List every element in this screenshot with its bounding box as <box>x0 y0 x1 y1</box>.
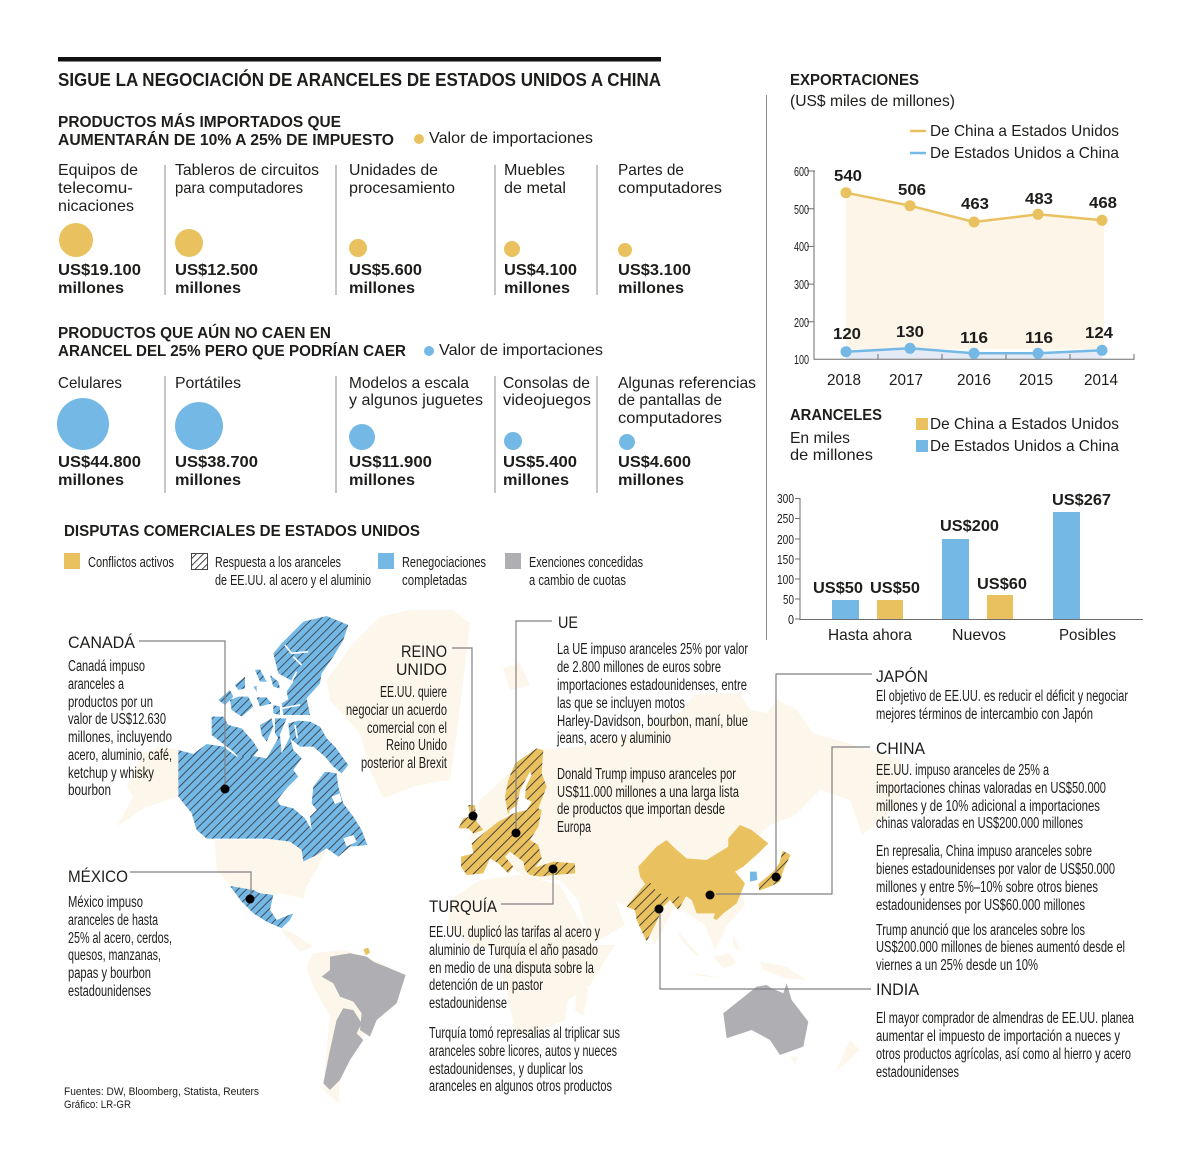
callout: UE: Donald Trump impuso aranceles por <box>557 766 736 783</box>
callout: Reino Unido: comercial con el <box>367 720 447 737</box>
line chart: exportaciones: 200 <box>794 316 809 330</box>
legend item: exenciones: a cambio de cuotas <box>529 572 626 589</box>
item: portátiles: US$38.700 <box>175 454 258 471</box>
item: pantallas de computadores: Algunas referencias <box>618 375 756 392</box>
map: islas árticas <box>212 616 348 773</box>
legend: aranceles: De Estados Unidos a China <box>930 438 1119 455</box>
map: Canadá <box>178 616 367 862</box>
callout: Canadá: productos por un <box>68 694 153 711</box>
bar chart: aranceles: US$50 <box>870 580 920 597</box>
line chart: exportaciones: 120 <box>833 326 861 343</box>
item: muebles de metal: millones <box>504 280 570 297</box>
callout: Turquía: detención de un pastor <box>429 977 543 994</box>
item: consolas de videojuegos: Consolas de <box>503 375 590 392</box>
callout: China: estadounidenses por US$60.000 millones <box>876 897 1085 914</box>
item: tableros de circuitos: para computadores <box>175 180 303 197</box>
item: partes de computadores: millones <box>618 280 684 297</box>
item: unidades de procesamiento: millones <box>349 280 415 297</box>
line chart: exportaciones: 2017 <box>889 372 923 389</box>
item: tableros de circuitos: US$12.500 <box>175 262 258 279</box>
legend: exportaciones: De Estados Unidos a China <box>930 145 1119 162</box>
line chart: exportaciones: 2015 <box>1019 372 1053 389</box>
callout: México: aranceles de hasta <box>68 912 158 929</box>
line chart: exportaciones: 116 <box>1025 330 1053 347</box>
bar chart: aranceles: 300 <box>777 492 794 506</box>
line chart: exportaciones <box>794 165 1134 389</box>
bar chart: aranceles <box>777 492 1143 644</box>
line chart: exportaciones: 468 <box>1089 195 1117 212</box>
bar chart: aranceles: US$60 <box>977 576 1027 593</box>
callout: Canadá: acero, aluminio, café, <box>68 747 172 764</box>
heading: productos más importados: PRODUCTOS MÁS IMPORTADOS QUE <box>58 112 341 131</box>
callout: Turquía: TURQUÍA <box>429 897 497 916</box>
item: pantallas de computadores: de pantallas de <box>618 392 722 409</box>
callout: Reino Unido: negociar un acuerdo <box>346 702 447 719</box>
callout: México: MÉXICO <box>68 867 128 886</box>
map: Reino Unido <box>458 805 483 833</box>
item: equipos de telecomunicaciones: Equipos de <box>58 162 138 179</box>
map: Corea del Sur <box>750 872 757 882</box>
map: Unión Europea <box>461 748 547 875</box>
item: modelos a escala: US$11.900 <box>349 454 432 471</box>
legend item: respuesta a aranceles <box>192 554 371 589</box>
item: portátiles: millones <box>175 472 241 489</box>
line chart: exportaciones: 483 <box>1025 191 1053 208</box>
callout: Canadá <box>68 633 230 799</box>
title rule <box>58 57 661 62</box>
map: China <box>638 825 768 920</box>
item: consolas de videojuegos <box>503 375 591 489</box>
item: celulares: Celulares <box>58 375 122 392</box>
map: background land <box>117 610 900 1103</box>
callout: Turquía: aluminio de Turquía el año pasado <box>429 942 598 959</box>
subheading: en miles de millones <box>790 430 873 464</box>
callout: México: papas y bourbon <box>68 965 151 982</box>
callout: China: millones y entre 5%–10% sobre otros bienes <box>876 879 1098 896</box>
callout: UE: Europa <box>557 819 591 836</box>
callout: México: México impuso <box>68 894 143 911</box>
item: celulares: US$44.800 <box>58 454 141 471</box>
callout: Reino Unido: REINO <box>401 643 447 661</box>
map: Australia <box>723 983 808 1055</box>
legend: disputas <box>64 553 643 589</box>
callout: Canadá: ketchup y whisky <box>68 765 154 782</box>
legend item: respuesta a aranceles: de EE.UU. al acero y el aluminio <box>215 572 371 589</box>
callout: India <box>654 904 1134 1081</box>
callout: Canadá: Canadá impuso <box>68 658 145 675</box>
heading: disputas comerciales: DISPUTAS COMERCIALES DE ESTADOS UNIDOS <box>64 523 420 540</box>
heading: productos que aún no caen: ARANCEL DEL 25% PERO QUE PODRÍAN CAER <box>58 341 406 360</box>
line chart: exportaciones: 2018 <box>827 372 861 389</box>
item: unidades de procesamiento: US$5.600 <box>349 262 422 279</box>
bar chart: aranceles: 0 <box>788 613 794 627</box>
legend item: conflictos activos: Conflictos activos <box>88 554 174 571</box>
line chart: exportaciones: 506 <box>898 182 926 199</box>
line chart: exportaciones: 463 <box>961 196 989 213</box>
callout: UE <box>512 614 748 838</box>
item: pantallas de computadores: US$4.600 <box>618 454 691 471</box>
item: unidades de procesamiento: procesamiento <box>349 180 455 197</box>
callout: UE: importaciones estadounidenses, entre <box>557 677 747 694</box>
legend item: renegociaciones: Renegociaciones <box>402 554 486 571</box>
map: India <box>627 880 687 942</box>
item: celulares: millones <box>58 472 124 489</box>
map: Canadá continental <box>178 735 367 862</box>
bar chart: aranceles: Nuevos <box>952 627 1006 644</box>
callout: China: En represalia, China impuso aranceles sobre <box>876 843 1092 860</box>
item: muebles de metal: US$4.100 <box>504 262 577 279</box>
callout: Reino Unido: EE.UU. quiere <box>380 684 447 701</box>
item: tableros de circuitos: millones <box>175 280 241 297</box>
line chart: exportaciones: 540 <box>834 168 862 185</box>
callout: Canadá: millones, incluyendo <box>68 729 172 746</box>
callout: México: 25% al acero, cerdos, <box>68 930 172 947</box>
line chart: exportaciones: 100 <box>794 353 809 367</box>
item: equipos de telecomunicaciones <box>58 162 141 297</box>
legend item: renegociaciones <box>378 553 486 589</box>
item: modelos a escala: millones <box>349 472 415 489</box>
callout: Turquía: estadounidense <box>429 995 507 1012</box>
callout: Turquía: estadounidenses, y duplicar los <box>429 1061 583 1078</box>
line chart: exportaciones: 2014 <box>1084 372 1118 389</box>
callout: Japón: JAPÓN <box>876 667 928 686</box>
callout: Turquía: Turquía tomó represalias al triplicar sus <box>429 1025 620 1042</box>
panel: exportaciones <box>790 72 1134 389</box>
heading: productos que aún no caen <box>58 323 406 360</box>
item: tableros de circuitos: Tableros de circuitos <box>175 162 319 179</box>
callout: China: viernes a un 25% desde un 10% <box>876 957 1038 974</box>
callout: UE: Harley-Davidson, bourbon, maní, blue <box>557 713 748 730</box>
callout: China: Trump anunció que los aranceles sobre los <box>876 922 1085 939</box>
world map <box>117 610 900 1103</box>
legend: exportaciones <box>910 123 1119 162</box>
heading: aranceles: ARANCELES <box>790 407 882 424</box>
item: unidades de procesamiento: Unidades de <box>349 162 438 179</box>
map: Guyana <box>363 948 370 955</box>
callout: China: importaciones chinas valoradas en US$50.000 <box>876 780 1106 797</box>
item: equipos de telecomunicaciones: millones <box>58 280 124 297</box>
callout: México <box>68 867 254 1000</box>
callout: Japón <box>772 667 1128 882</box>
subheading: en miles de millones: de millones <box>790 447 873 464</box>
item: modelos a escala: y algunos juguetes <box>349 392 483 409</box>
callout: Turquía: aranceles sobre licores, autos y nueces <box>429 1043 617 1060</box>
subheading: unidades: (US$ miles de millones) <box>790 93 955 110</box>
callout: Turquía: aranceles en algunos otros productos <box>429 1078 612 1095</box>
line chart: exportaciones: 600 <box>794 165 809 179</box>
legend: exportaciones: De China a Estados Unidos <box>930 123 1119 140</box>
legend item: exenciones <box>505 553 643 589</box>
legend: valor de importaciones: Valor de importaciones <box>429 130 593 147</box>
legend: aranceles <box>916 416 1119 455</box>
sources: Fuentes: DW, Bloomberg, Statista, Reuters <box>64 1086 259 1098</box>
sources <box>64 1086 259 1111</box>
callout: Turquía: EE.UU. duplicó las tarifas al acero y <box>429 924 600 941</box>
callout: UE: jeans, acero y aluminio <box>556 730 671 747</box>
item: partes de computadores: US$3.100 <box>618 262 691 279</box>
item: pantallas de computadores: computadores <box>618 410 722 427</box>
panel: aranceles <box>777 407 1143 644</box>
item: muebles de metal <box>504 162 577 297</box>
bar chart: aranceles: 50 <box>783 593 794 607</box>
callout: China: chinas valoradas en US$200.000 millones <box>876 815 1083 832</box>
item: consolas de videojuegos: millones <box>503 472 569 489</box>
callout: Turquía <box>429 864 620 1095</box>
item: equipos de telecomunicaciones: US$19.100 <box>58 262 141 279</box>
callout: China: EE.UU. impuso aranceles de 25% a <box>876 762 1049 779</box>
sources: Gráfico: LR-GR <box>64 1099 131 1111</box>
item: portátiles <box>175 375 258 489</box>
callout: Reino Unido <box>346 643 478 820</box>
item: celulares <box>57 375 141 489</box>
bar chart: aranceles: 200 <box>777 533 794 547</box>
callout: Japón: mejores términos de intercambio con Japón <box>876 706 1093 723</box>
item: partes de computadores: computadores <box>618 180 722 197</box>
bar chart: aranceles: 150 <box>777 553 794 567</box>
map: Argentina <box>323 1008 363 1090</box>
legend item: exenciones: Exenciones concedidas <box>529 554 643 571</box>
item: pantallas de computadores <box>618 375 756 489</box>
bar chart: aranceles: Posibles <box>1059 627 1116 644</box>
map: Japón <box>758 851 791 891</box>
item: modelos a escala <box>349 375 483 489</box>
callout: China: CHINA <box>876 740 925 758</box>
item: consolas de videojuegos: US$5.400 <box>503 454 577 471</box>
item: pantallas de computadores: millones <box>618 472 684 489</box>
callout: Canadá: valor de US$12.630 <box>68 711 166 728</box>
callout: Canadá: bourbon <box>68 782 111 799</box>
legend: aranceles: De China a Estados Unidos <box>930 416 1119 433</box>
map: Turquía <box>525 862 575 877</box>
legend item: respuesta a aranceles: Respuesta a los aranceles <box>215 554 341 571</box>
bar chart: aranceles: US$50 <box>813 580 863 597</box>
callout: India: estadounidenses <box>876 1064 959 1081</box>
line chart: exportaciones: 124 <box>1085 325 1113 342</box>
callout: UE: de productos que importan desde <box>557 801 725 818</box>
callout: México: quesos, manzanas, <box>68 947 161 964</box>
legend item: conflictos activos <box>64 553 174 571</box>
line chart: exportaciones: 400 <box>794 240 809 254</box>
callout: China: millones y de 10% adicional a importaciones <box>876 798 1100 815</box>
map: México <box>230 886 293 928</box>
bar chart: aranceles: 100 <box>777 573 794 587</box>
callout: Reino Unido: posterior al Brexit <box>361 755 447 772</box>
item: muebles de metal: Muebles <box>504 162 565 179</box>
callout: China <box>706 740 1125 974</box>
bar chart: aranceles: Hasta ahora <box>828 627 912 644</box>
callout: UE: de 2.800 millones de euros sobre <box>557 659 721 676</box>
subheading: en miles de millones: En miles <box>790 430 850 447</box>
item: muebles de metal: de metal <box>504 180 566 197</box>
heading: productos más importados <box>58 112 394 149</box>
callout: UE: las que se incluyen motos <box>557 695 685 712</box>
line chart: exportaciones: 116 <box>960 330 988 347</box>
legend item: renegociaciones: completadas <box>402 572 467 589</box>
callout: México: estadounidenses <box>68 983 151 1000</box>
item: equipos de telecomunicaciones: nicaciones <box>58 198 134 215</box>
item: modelos a escala: Modelos a escala <box>349 375 469 392</box>
callout: UE: US$11.000 millones a una larga lista <box>557 784 739 801</box>
item: partes de computadores: Partes de <box>618 162 684 179</box>
item: equipos de telecomunicaciones: telecomu- <box>58 180 133 197</box>
line chart: exportaciones: 500 <box>794 203 809 217</box>
legend: valor de importaciones azul: Valor de importaciones <box>439 342 603 359</box>
item: unidades de procesamiento <box>349 162 455 297</box>
bar chart: aranceles: 250 <box>777 512 794 526</box>
panel: productos que podrían caer <box>57 323 756 493</box>
bar chart: aranceles: US$267 <box>1052 492 1111 509</box>
callout: UE: La UE impuso aranceles 25% por valor <box>557 641 748 658</box>
map: Brasil <box>322 953 406 1037</box>
callout: Canadá: aranceles a <box>68 676 124 693</box>
line chart: exportaciones: 130 <box>896 324 924 341</box>
panel: productos más importados <box>58 112 722 297</box>
heading: productos que aún no caen: PRODUCTOS QUE AÚN NO CAEN EN <box>58 323 331 342</box>
item: partes de computadores <box>618 162 722 297</box>
callout: Reino Unido: Reino Unido <box>386 737 447 754</box>
title: SIGUE LA NEGOCIACIÓN DE ARANCELES DE ESTADOS UNIDOS A CHINA <box>58 69 661 90</box>
item: portátiles: Portátiles <box>175 375 241 392</box>
callout: UE: UE <box>558 614 578 632</box>
heading: exportaciones: EXPORTACIONES <box>790 72 919 89</box>
item: tableros de circuitos <box>175 162 319 297</box>
callout: Reino Unido: UNIDO <box>396 661 447 679</box>
callout: Turquía: en medio de una disputa sobre la <box>429 960 594 977</box>
callout: Canadá: CANADÁ <box>68 633 135 652</box>
callout: India: INDIA <box>876 981 919 999</box>
heading: productos más importados: AUMENTARÁN DE 10% A 25% DE IMPUESTO <box>58 130 394 149</box>
line chart: exportaciones: 300 <box>794 278 809 292</box>
item: consolas de videojuegos: videojuegos <box>503 392 591 409</box>
line chart: exportaciones: 2016 <box>957 372 991 389</box>
bar chart: aranceles: US$200 <box>940 518 999 535</box>
